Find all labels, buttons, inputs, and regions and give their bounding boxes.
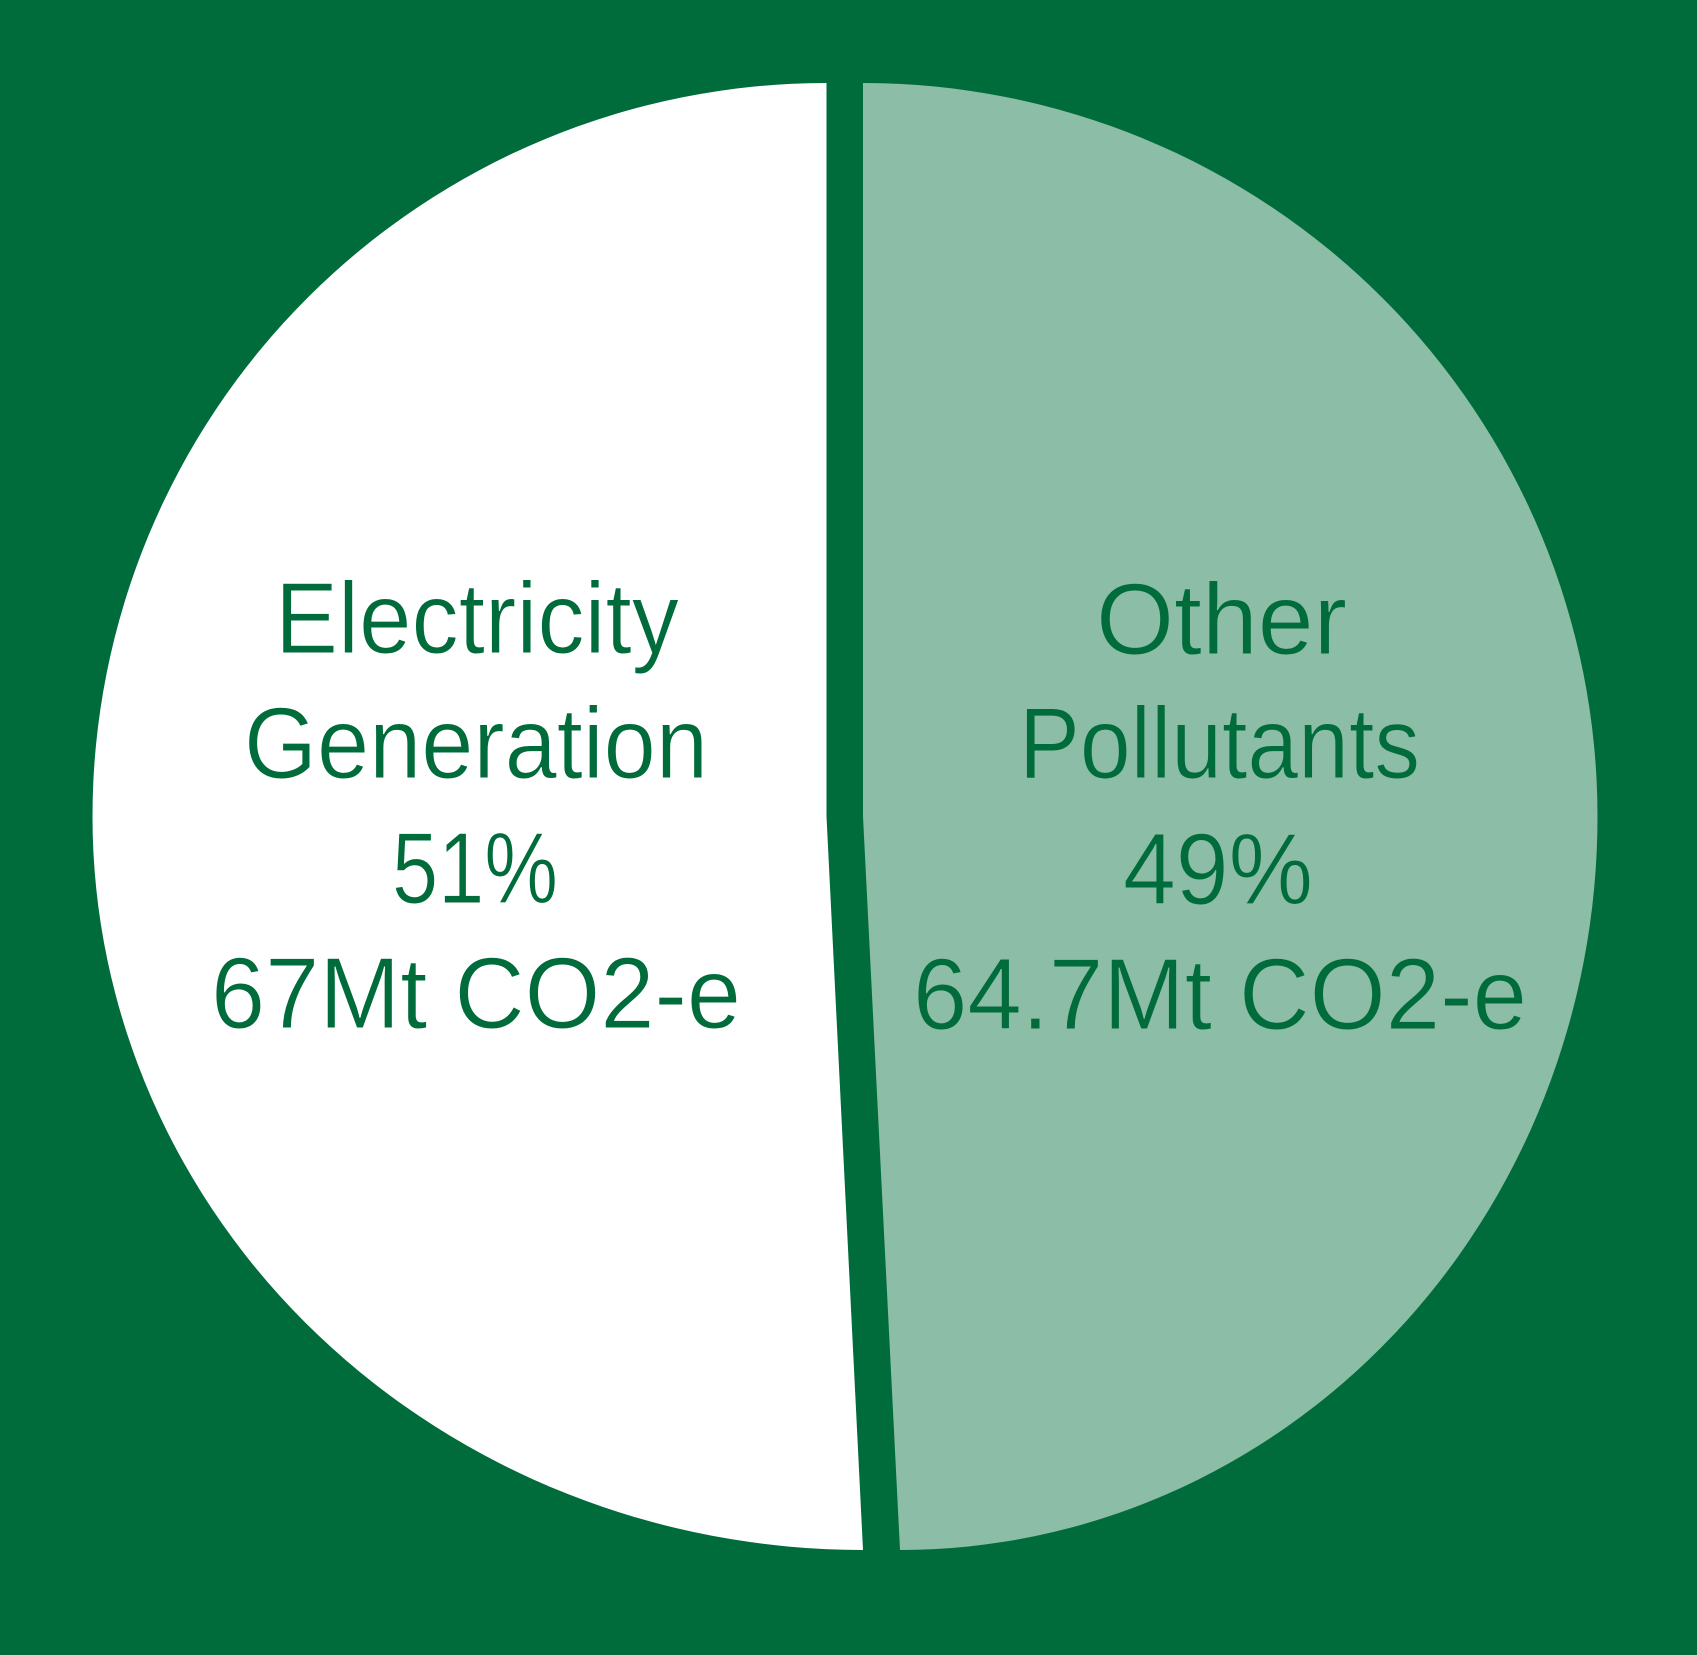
label: Electricity Generation: 67Mt CO2-e (211, 938, 741, 1050)
label: Other Pollutants: 49% (1123, 814, 1313, 926)
label: Other Pollutants: Other (1096, 564, 1347, 676)
label: Electricity Generation (211, 563, 741, 1050)
label: Electricity Generation: Generation (244, 688, 708, 800)
label: Other Pollutants (913, 564, 1527, 1051)
label: Electricity Generation: Electricity (275, 563, 679, 675)
label: Other Pollutants: 64.7Mt CO2-e (913, 939, 1527, 1051)
pie slice: Electricity Generation (92, 83, 863, 1550)
label: Electricity Generation: 51% (392, 813, 558, 925)
label: Other Pollutants: Pollutants (1019, 688, 1420, 800)
pie slice: Other Pollutants (863, 83, 1598, 1550)
